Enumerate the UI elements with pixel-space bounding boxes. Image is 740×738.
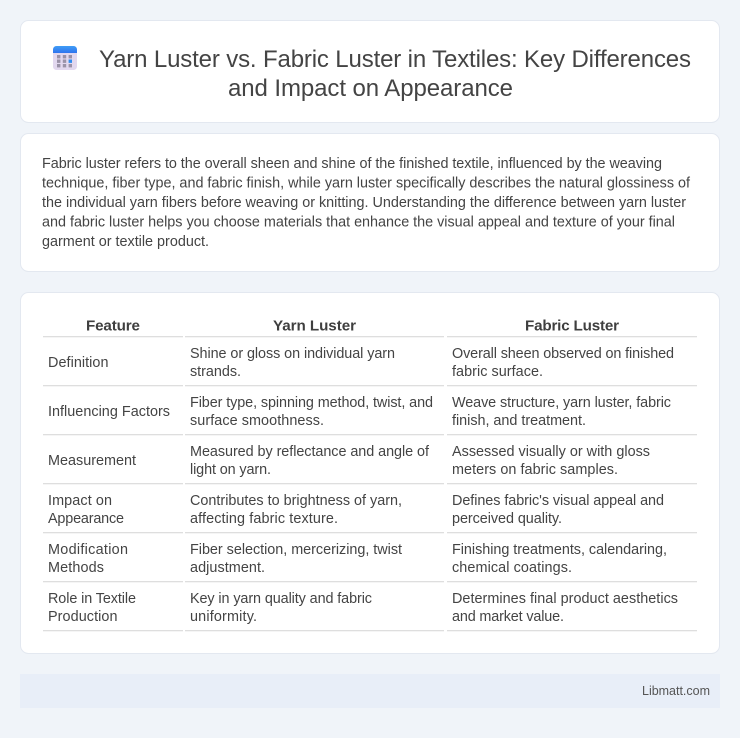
text block: introduction paragraph: garment or textile product. bbox=[42, 234, 209, 250]
row: modification methods: adjustment. bbox=[190, 560, 265, 576]
table header: Yarn Luster bbox=[273, 318, 356, 334]
row: definition: Overall sheen observed on finished bbox=[452, 346, 674, 362]
title: Yarn Luster vs. Fabric Luster in Textiles: Key Differences bbox=[99, 46, 691, 73]
text block: introduction paragraph: Fabric luster refers to the overall sheen and shine of the finished textile, influenced by the weaving bbox=[42, 156, 662, 172]
row: definition: Shine or gloss on individual yarn bbox=[190, 346, 395, 362]
row: impact on appearance: affecting fabric texture. bbox=[190, 511, 338, 527]
table header bbox=[43, 318, 697, 337]
row: influencing factors: Weave structure, yarn luster, fabric bbox=[452, 395, 671, 411]
row: modification methods: Methods bbox=[48, 560, 104, 576]
row: definition: fabric surface. bbox=[452, 364, 543, 380]
title: and Impact on Appearance bbox=[228, 75, 513, 102]
row: definition: strands. bbox=[190, 364, 241, 380]
row: measurement: Assessed visually or with gloss bbox=[452, 444, 650, 460]
row: role in textile production bbox=[43, 591, 697, 631]
row: measurement bbox=[43, 444, 697, 484]
row: impact on appearance: Contributes to brightness of yarn, bbox=[190, 493, 402, 509]
row: influencing factors: finish, and treatment. bbox=[452, 413, 586, 429]
row: modification methods: chemical coatings. bbox=[452, 560, 572, 576]
table header: Fabric Luster bbox=[525, 318, 619, 334]
row: impact on appearance: Impact on bbox=[48, 493, 112, 509]
row: modification methods: Finishing treatments, calendaring, bbox=[452, 542, 667, 558]
footer bbox=[20, 674, 720, 708]
row: impact on appearance: Defines fabric's visual appeal and bbox=[452, 493, 664, 509]
title bbox=[99, 46, 691, 102]
row: measurement: meters on fabric samples. bbox=[452, 462, 618, 478]
footer credit: Libmatt.com bbox=[642, 684, 710, 698]
row: measurement: Measurement bbox=[48, 453, 136, 469]
icon: calendar grid bbox=[53, 46, 77, 70]
row: modification methods: Modification bbox=[48, 542, 128, 558]
row: measurement: light on yarn. bbox=[190, 462, 271, 478]
row: impact on appearance: Appearance bbox=[48, 511, 124, 527]
panel: header bbox=[20, 20, 720, 122]
row: definition: Definition bbox=[48, 355, 108, 371]
row: influencing factors bbox=[43, 395, 697, 435]
row: role in textile production: Determines final product aesthetics bbox=[452, 591, 678, 607]
row: measurement: Measured by reflectance and angle of bbox=[190, 444, 430, 460]
row: role in textile production: Production bbox=[48, 609, 118, 625]
row: influencing factors: Influencing Factors bbox=[48, 404, 170, 420]
row: influencing factors: surface smoothness. bbox=[190, 413, 324, 429]
row: definition bbox=[43, 346, 697, 386]
text block: introduction paragraph: the individual yarn fibers before weaving or knitting. Understanding the difference between yarn luster bbox=[42, 195, 686, 211]
row: role in textile production: Key in yarn quality and fabric bbox=[190, 591, 372, 607]
table header: Feature bbox=[86, 318, 140, 334]
text block: introduction paragraph bbox=[42, 156, 691, 250]
row: modification methods bbox=[43, 542, 697, 582]
row: role in textile production: and market value. bbox=[452, 609, 564, 625]
row: impact on appearance bbox=[43, 493, 697, 533]
panel: introduction bbox=[20, 134, 720, 272]
row: impact on appearance: perceived quality. bbox=[452, 511, 562, 527]
text block: introduction paragraph: technique, fiber type, and fabric finish, while yarn luster specifically describes the natural glossiness of bbox=[42, 176, 691, 192]
row: influencing factors: Fiber type, spinning method, twist, and bbox=[190, 395, 433, 411]
row: role in textile production: Role in Textile bbox=[48, 591, 136, 607]
text block: introduction paragraph: and fabric luster helps you choose materials that enhance the visual appeal and texture of your final bbox=[42, 214, 675, 230]
row: role in textile production: uniformity. bbox=[190, 609, 257, 625]
row: modification methods: Fiber selection, mercerizing, twist bbox=[190, 542, 402, 558]
panel: comparison table bbox=[20, 292, 720, 654]
